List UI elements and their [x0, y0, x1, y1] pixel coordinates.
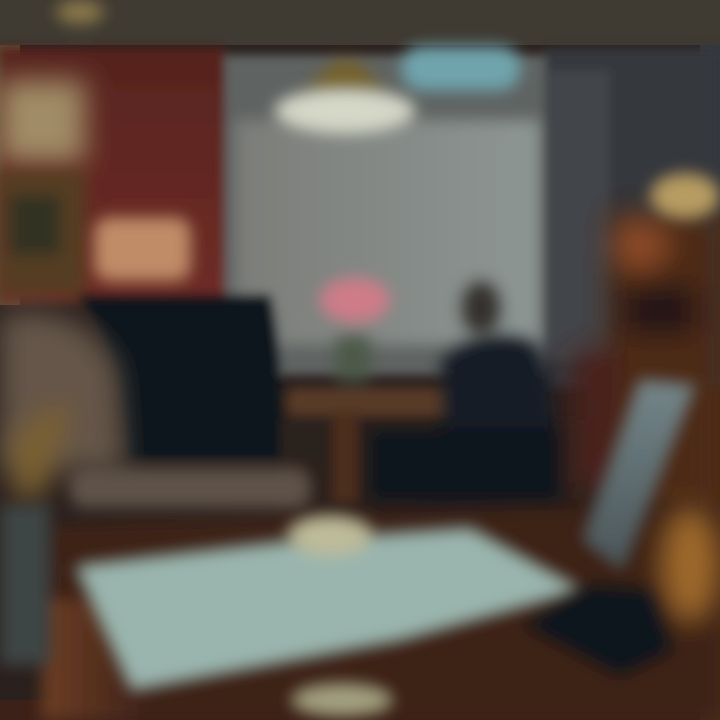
table top [287, 388, 482, 416]
desk glow right [660, 507, 720, 623]
seated person [420, 281, 556, 490]
pendant lamp [275, 60, 415, 133]
table leg [332, 412, 358, 502]
dark navy armchair [78, 295, 282, 460]
wall: red left section [0, 48, 225, 303]
wall: centre grey section [225, 55, 550, 375]
right bookshelf [572, 212, 720, 512]
table lamp glow [95, 218, 190, 280]
head [461, 281, 501, 335]
pencil cup [0, 400, 70, 665]
blurred foreground chair [0, 312, 125, 470]
pencils [10, 400, 70, 500]
cup [0, 505, 50, 665]
phone on stand [525, 380, 695, 675]
blossoms [320, 278, 390, 322]
stand base [525, 585, 672, 675]
vase [335, 335, 371, 381]
window blind [235, 120, 540, 345]
lamp on right shelf [651, 174, 719, 218]
lamp glow [275, 89, 415, 133]
light: top left [56, 0, 104, 24]
lamp shade top [305, 60, 385, 92]
glow on paper [288, 516, 372, 556]
foreground desk [40, 505, 720, 720]
sofa seat [70, 468, 310, 508]
desk reflection bottom [292, 684, 392, 716]
flowers [320, 278, 390, 381]
body [420, 336, 556, 490]
paper sheet [76, 528, 582, 690]
wall: dark right section [545, 48, 720, 388]
left shelf lower [0, 170, 85, 295]
phone body [583, 380, 695, 570]
side table [287, 388, 482, 502]
floor background [280, 420, 600, 520]
left shelf upper [0, 80, 85, 162]
dark chair near person [370, 430, 560, 500]
light: blue ceiling panel [402, 46, 520, 90]
